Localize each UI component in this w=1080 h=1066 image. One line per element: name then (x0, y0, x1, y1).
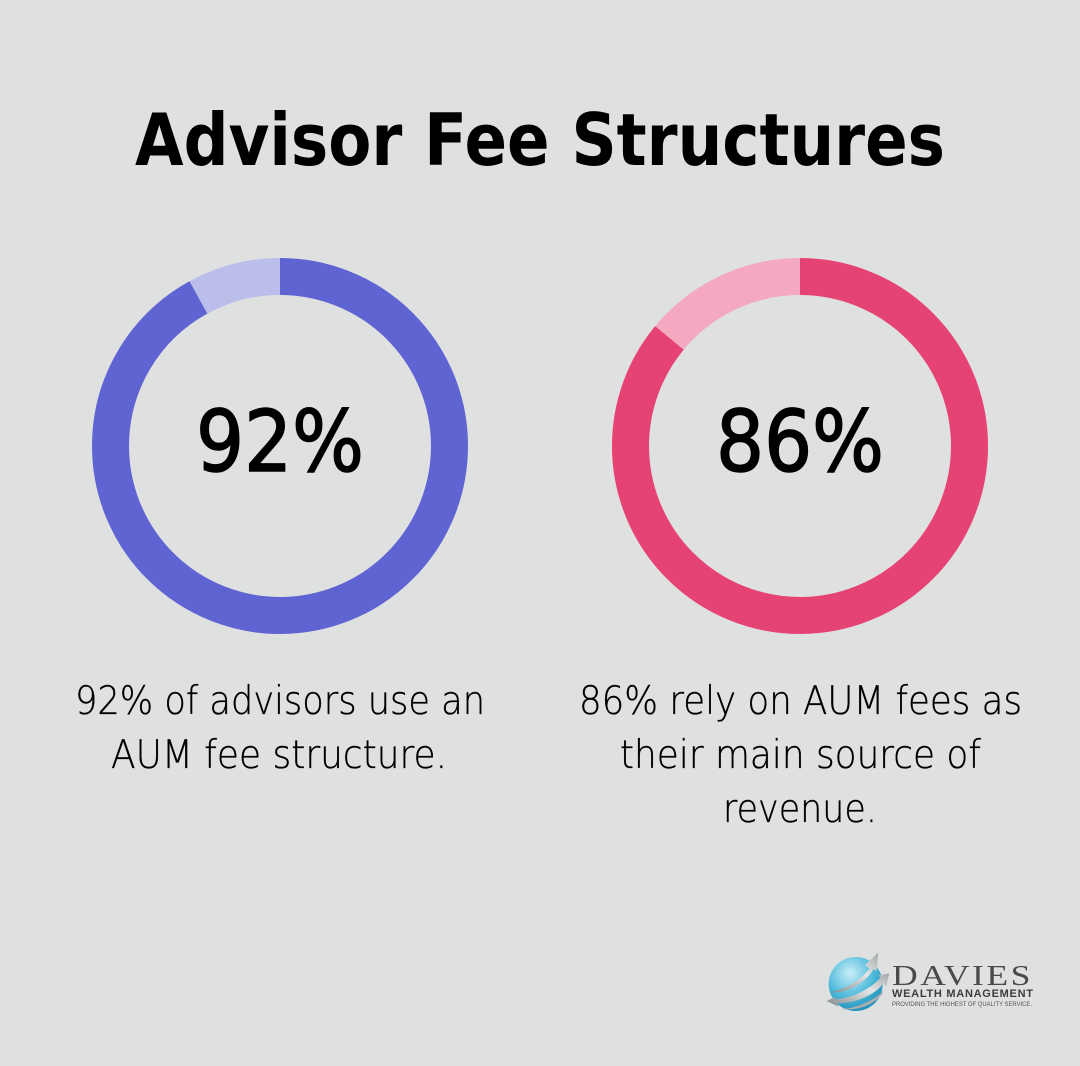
description: 86%: 86% rely on AUM fees as (579, 679, 1022, 724)
wordmark: Wealth Management: WEALTH MANAGEMENT (892, 988, 1033, 1000)
description: 86%: their main source of (620, 733, 981, 778)
icon: globe with arrows (827, 953, 889, 1011)
description: 92%: AUM fee structure. (111, 733, 447, 778)
tagline: PROVIDING THE HIGHEST OF QUALITY SERVICE. (892, 1001, 1032, 1008)
donut chart: 92% (110, 276, 450, 616)
value: 86%: 86% (716, 393, 884, 492)
panel: 92% AUM fee structure (75, 276, 485, 778)
panel: 86% main revenue source (579, 276, 1022, 832)
title: Advisor Fee Structures (135, 98, 945, 182)
wordmark: Davies: DAVIES (892, 961, 1033, 992)
logo: Davies Wealth Management (827, 953, 1033, 1011)
description: 86%: revenue. (723, 787, 877, 832)
value: 92%: 92% (196, 393, 364, 492)
description: 92% (75, 679, 485, 778)
description: 86% (579, 679, 1022, 832)
description: 92%: 92% of advisors use an (75, 679, 485, 724)
donut chart: 86% (630, 276, 970, 616)
